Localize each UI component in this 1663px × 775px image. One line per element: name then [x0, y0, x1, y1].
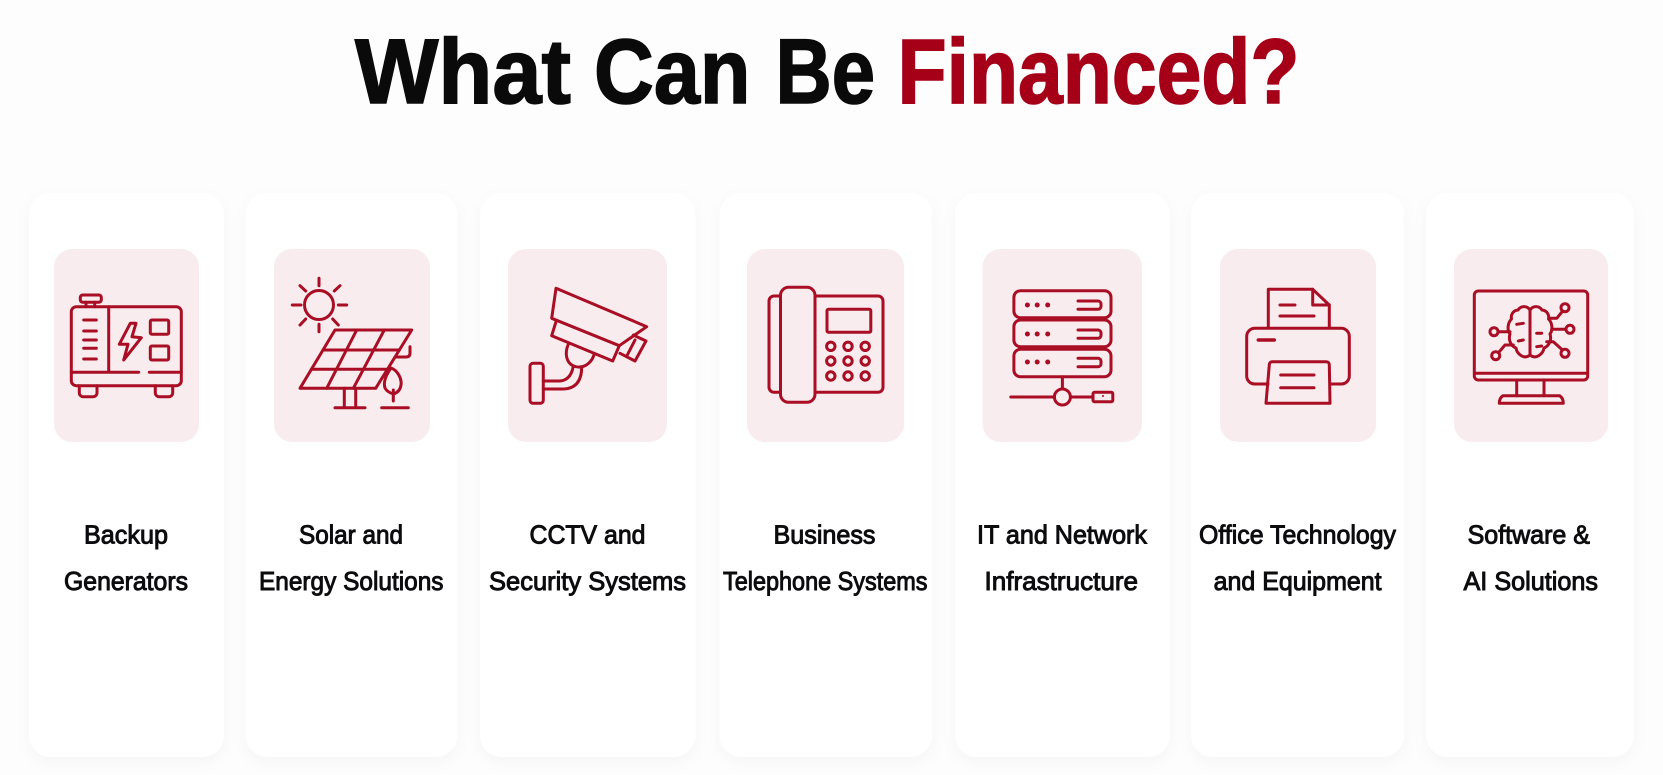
icon: printer [1247, 289, 1349, 403]
label: Telephone Systems [723, 566, 928, 596]
title: Can [594, 21, 750, 123]
panel: solar and energy solutions [246, 193, 458, 757]
label [723, 520, 928, 596]
label [259, 520, 444, 596]
label [977, 520, 1148, 596]
label: Backup [84, 520, 168, 550]
label: Business [774, 520, 876, 550]
label: Solar and [299, 520, 403, 550]
panel: backup generators [29, 193, 224, 757]
icon: server rack [1011, 291, 1113, 405]
icon: security camera [530, 288, 647, 403]
icon: monitor with ai brain [1474, 291, 1588, 403]
title [355, 21, 1300, 123]
panel: software and ai solutions [1426, 193, 1634, 757]
label [1199, 520, 1396, 596]
panel: office technology and equipment [1191, 193, 1404, 757]
label: AI Solutions [1464, 566, 1598, 596]
label: Security Systems [489, 566, 686, 596]
icon: solar panel [292, 278, 412, 408]
label: CCTV and [530, 520, 646, 550]
panel: cctv and security systems [480, 193, 696, 757]
title: Financed? [898, 21, 1300, 123]
label [1464, 520, 1598, 596]
label: Software & [1468, 520, 1590, 550]
label: Energy Solutions [259, 566, 444, 596]
label: and Equipment [1214, 566, 1382, 596]
panel: business telephone systems [720, 193, 932, 757]
label: Office Technology [1199, 520, 1396, 550]
icon: desk phone [769, 287, 883, 402]
title: What [355, 21, 571, 123]
icon: generator [71, 295, 181, 397]
label [64, 520, 188, 596]
label: Infrastructure [984, 566, 1138, 596]
label: IT and Network [977, 520, 1148, 550]
label: Generators [64, 566, 188, 596]
title: Be [776, 21, 875, 123]
panel: it and network infrastructure [955, 193, 1170, 757]
label [489, 520, 686, 596]
